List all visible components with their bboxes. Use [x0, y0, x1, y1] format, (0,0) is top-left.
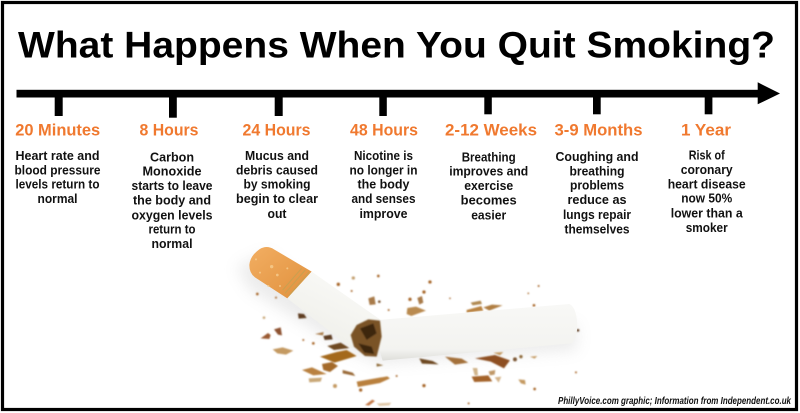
tobacco flecks [256, 275, 579, 406]
column: 8 hours: 8 Hours [140, 121, 198, 140]
column: 3-9 months: 3-9 Months [554, 121, 642, 140]
column: 1 year [668, 121, 746, 235]
tick: 2-12 weeks [484, 96, 492, 114]
column: 2-12 weeks: becomes [461, 193, 517, 207]
column: 2-12 weeks: improves and [449, 165, 528, 179]
column: 20 minutes: normal [38, 192, 78, 206]
column: 24 hours: debris caused [236, 163, 318, 177]
column: 2-12 weeks: exercise [464, 179, 513, 193]
title: What Happens When You Quit Smoking? [18, 24, 775, 66]
column: 2-12 weeks: Breathing [462, 150, 516, 164]
column: 48 hours: no longer in [350, 163, 418, 177]
column: 1 year: 1 Year [681, 121, 731, 140]
column: 48 hours: the body [358, 178, 410, 192]
left paper segment [287, 272, 380, 348]
column: 1 year: now 50% [681, 192, 732, 206]
column: 20 minutes: Heart rate and [16, 149, 100, 163]
column: 8 hours: oxygen levels [132, 208, 213, 222]
filter tip [249, 247, 312, 298]
column: 3-9 months: reduce as [568, 193, 627, 207]
column: 24 hours [236, 121, 318, 221]
column: 48 hours [350, 121, 418, 221]
column: 3-9 months: themselves [564, 222, 630, 236]
column: 8 hours: Carbon [150, 150, 194, 164]
tick: 20 minutes [55, 96, 63, 116]
column: 1 year: smoker [686, 221, 728, 235]
column: 20 minutes [14, 121, 101, 206]
column: 20 minutes: blood pressure [14, 163, 101, 177]
cigarette shadow [237, 253, 577, 363]
column: 3-9 months: breathing [570, 164, 624, 178]
timeline arrow [16, 82, 780, 118]
tick: 48 hours [379, 96, 387, 116]
column: 8 hours: Monoxide [142, 165, 202, 179]
column: 3-9 months: Coughing and [556, 150, 638, 164]
column: 3-9 months: problems [570, 179, 624, 193]
column: 2-12 weeks: 2-12 Weeks [445, 121, 537, 140]
column: 3-9 months [554, 121, 642, 236]
column: 1 year: lower than a [671, 207, 744, 221]
tick: 3-9 months [593, 96, 601, 114]
column: 48 hours: 48 Hours [350, 121, 418, 140]
right paper segment [378, 304, 577, 361]
column: 20 minutes: levels return to [16, 178, 100, 192]
filter speckles [255, 258, 288, 287]
column: 20 minutes: 20 Minutes [15, 121, 100, 140]
column: 8 hours [132, 121, 213, 251]
torn tobacco end [351, 319, 382, 357]
column: 48 hours: improve [360, 207, 408, 221]
column: 8 hours: return to [148, 223, 196, 237]
column: 48 hours: Nicotine is [354, 149, 413, 163]
column: 8 hours: starts to leave [132, 179, 213, 193]
gold bands [283, 268, 309, 296]
column: 24 hours: 24 Hours [242, 121, 310, 140]
column: 24 hours: begin to clear [236, 192, 318, 206]
column: 3-9 months: lungs repair [563, 208, 631, 222]
tick: 8 hours [169, 96, 177, 118]
column: 24 hours: Mucus and [245, 149, 309, 163]
column: 24 hours: out [268, 207, 287, 221]
tick: 1 year [705, 96, 712, 114]
column: 8 hours: normal [152, 237, 192, 251]
column: 1 year: coronary [681, 163, 733, 177]
column: 1 year: Risk of [689, 149, 725, 163]
column: 24 hours: by smoking [244, 178, 310, 192]
illustration: broken cigarette [237, 247, 579, 406]
column: 2-12 weeks: easier [471, 208, 506, 222]
column: 1 year: heart disease [668, 177, 746, 191]
column: 2-12 weeks [445, 121, 537, 222]
column: 8 hours: the body and [133, 193, 211, 207]
tick: 24 hours [275, 96, 283, 116]
column: 48 hours: and senses [352, 192, 416, 206]
